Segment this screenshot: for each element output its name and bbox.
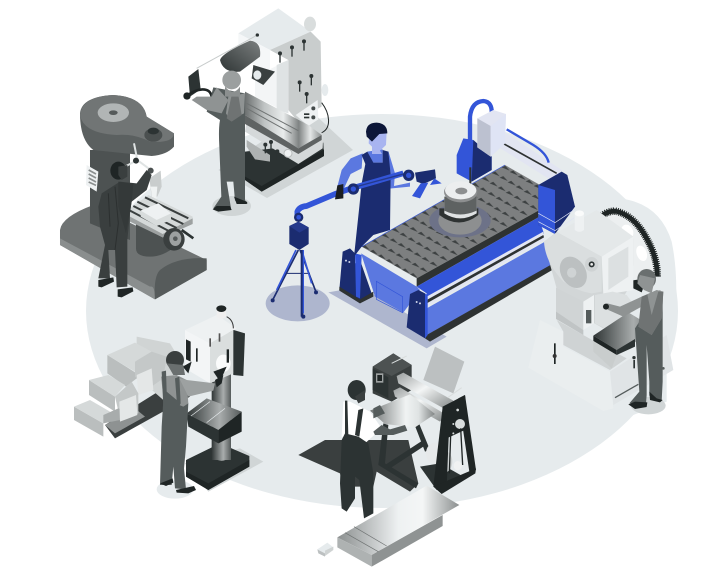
perforated bed [362, 165, 540, 278]
tripod shadow [266, 285, 330, 321]
operator apron [354, 150, 391, 257]
press pulley [554, 252, 598, 293]
under-table knee [245, 120, 323, 164]
CNC bottom rail [425, 263, 555, 342]
floor shadow [298, 440, 418, 492]
press bed [593, 312, 660, 368]
finished sheet stack [337, 486, 459, 567]
background ellipse [86, 114, 678, 508]
stacked metal parts [74, 337, 190, 438]
rails [427, 232, 544, 307]
collar [212, 448, 231, 461]
roller frame left [373, 353, 412, 402]
electrical box [556, 288, 594, 335]
floor shadow [328, 287, 447, 348]
machine: CNC router table [266, 101, 575, 348]
operator right sleeve [383, 151, 410, 189]
operator left sleeve [337, 153, 363, 188]
roller frame right [433, 388, 476, 494]
spindle bit [469, 167, 471, 184]
CNC side panel [361, 253, 420, 313]
cable [322, 103, 329, 133]
measuring arm base [289, 222, 309, 250]
press throat [595, 292, 637, 328]
drill column [212, 368, 231, 460]
machine base [245, 143, 324, 192]
spindle housing [220, 41, 275, 85]
floor shadow [185, 448, 263, 492]
side lever and slot [615, 356, 665, 398]
pendant control box [188, 33, 259, 97]
small offcut [317, 543, 333, 557]
sheet being fed [370, 394, 435, 427]
radial drill press [60, 95, 207, 299]
CNC front foot [407, 290, 428, 338]
machine: milling machine with worker [60, 8, 353, 299]
CNC front panel [427, 242, 555, 335]
floor shadow [218, 110, 353, 198]
operator [337, 123, 410, 257]
drill head [185, 315, 245, 383]
tripod [273, 250, 316, 300]
raised sheet [423, 347, 464, 393]
worker [603, 269, 666, 414]
foundation [528, 320, 673, 411]
machine: sheet metal roller with worker [298, 347, 476, 567]
spindle box [477, 110, 506, 157]
rollers [393, 373, 453, 422]
head levers [209, 333, 220, 347]
motor [420, 443, 463, 490]
drill motor [216, 305, 233, 328]
gantry left block [457, 138, 492, 182]
worker [157, 351, 223, 499]
gantry rail [495, 133, 562, 183]
machine: pedestal drill with worker and stacked parts [74, 305, 263, 499]
hand wheel [187, 89, 212, 97]
machine: power press with worker [528, 198, 676, 415]
levers [278, 39, 313, 103]
bed edges [362, 165, 544, 299]
workpiece [429, 181, 491, 237]
control panel [296, 100, 318, 126]
drill base [186, 443, 249, 490]
top cylinder [575, 210, 584, 232]
lower frame [378, 422, 430, 488]
articulated arm [294, 169, 442, 222]
scanner gun [412, 169, 442, 198]
table levers [263, 140, 279, 160]
flywheel [600, 211, 657, 292]
gantry right block [538, 172, 575, 234]
feed rod [197, 35, 257, 68]
gantry cable [507, 129, 549, 163]
CNC left foot [339, 248, 373, 303]
operator head [366, 123, 387, 154]
operator chest [367, 149, 383, 163]
machine column [238, 8, 328, 120]
flywheel shadow [528, 198, 676, 415]
gantry tube [470, 101, 492, 147]
worker left [98, 162, 152, 297]
worker right [192, 71, 251, 216]
gauge mark [553, 343, 557, 364]
press frame [544, 210, 633, 328]
drill table [187, 398, 242, 443]
machine table [245, 92, 322, 154]
worker [340, 380, 407, 518]
